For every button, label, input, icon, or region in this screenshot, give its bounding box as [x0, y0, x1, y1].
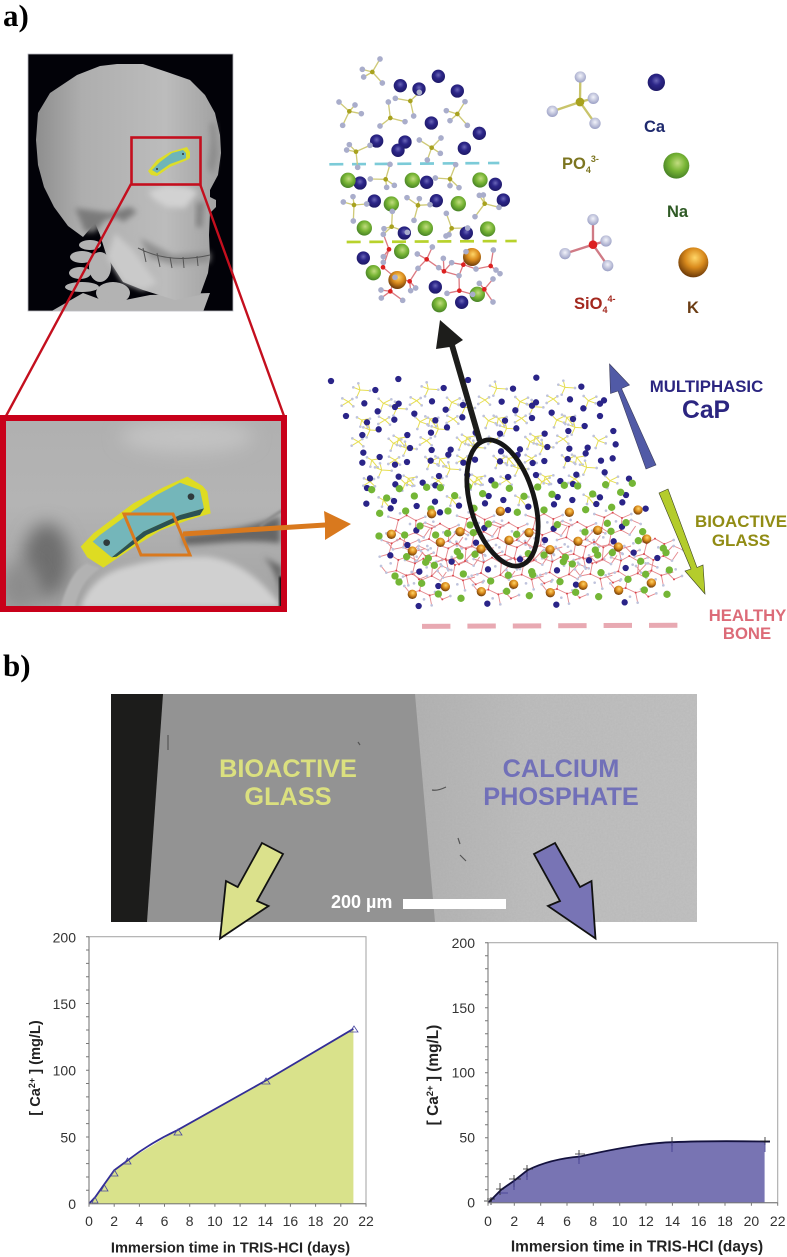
x axis numbers: 22: [770, 1213, 786, 1229]
panel: layered coating molecular model: [331, 378, 683, 606]
x axis numbers: 12: [638, 1213, 654, 1229]
x axis numbers: 14: [258, 1213, 273, 1229]
y axis title: ] (mg/L): [425, 1025, 442, 1085]
chart: calcium phosphate Ca release: [425, 935, 786, 1256]
x axis numbers: 0: [85, 1213, 93, 1229]
panel: 3D skull with implant: [28, 54, 233, 312]
x axis numbers: 10: [207, 1213, 223, 1229]
x axis title: Immersion time in TRIS-HCI (days): [511, 1238, 763, 1256]
y axis title: 2+: [425, 1085, 436, 1096]
legend: K atom: [678, 247, 708, 277]
label: multiphasic CaP: [650, 377, 763, 424]
legend label: Ca: Ca: [644, 118, 666, 136]
zoom box on skull: [132, 138, 200, 184]
legend label: PO4 3-: PO: [562, 155, 586, 173]
x axis numbers: 16: [691, 1213, 707, 1229]
orange selection parallelogram: [124, 514, 190, 555]
x axis numbers: 10: [612, 1213, 628, 1229]
arrow: bioactive glass to chart: [220, 843, 283, 938]
label: bioactive glass: GLASS: [712, 531, 770, 550]
y axis numbers: 200: [53, 930, 76, 946]
y axis numbers: 50: [60, 1130, 76, 1146]
legend label: Na: Na: [667, 203, 689, 221]
silicon atoms: [383, 249, 491, 291]
teeth: [138, 248, 210, 268]
arrow: calcium phosphate to chart: [534, 843, 596, 938]
label: multiphasic CaP: CaP: [682, 397, 730, 424]
scale bar: [403, 899, 506, 909]
y axis numbers: 150: [53, 996, 76, 1012]
legend: Ca atom: [648, 74, 665, 91]
label: bioactive glass on SEM: [219, 755, 357, 811]
green arrow: bioactive glass direction: [659, 489, 705, 594]
chart: bioactive glass Ca release: [27, 930, 374, 1256]
oxygen atoms: [339, 59, 500, 302]
x axis numbers: 16: [283, 1213, 298, 1229]
axes and ticks: [485, 943, 778, 1206]
y axis numbers: 0: [68, 1196, 76, 1212]
skull shading: [75, 123, 218, 290]
label: bioactive glass: [695, 512, 787, 550]
label: healthy bone: BONE: [723, 624, 771, 643]
y axis numbers: 50: [459, 1130, 475, 1146]
legend label: SiO4 4-: 4-: [607, 294, 615, 304]
black arrow to close-up: [436, 320, 482, 442]
inset red frame: [3, 418, 284, 609]
x axis title: Immersion time in TRIS-HCI (days): [111, 1240, 350, 1256]
area under curve: [488, 1142, 765, 1203]
x axis numbers: 8: [589, 1213, 597, 1229]
area under curve: [89, 1029, 353, 1204]
x axis numbers: 2: [510, 1213, 518, 1229]
x axis numbers: [484, 1213, 786, 1229]
y axis numbers: 100: [452, 1064, 475, 1080]
blue divider line: [329, 163, 499, 164]
sodium atoms: [340, 172, 495, 312]
plot frame: [488, 943, 778, 1203]
implant: yellow border: [81, 477, 211, 568]
x axis numbers: 12: [232, 1213, 248, 1229]
green divider line: [347, 237, 517, 246]
y axis numbers: [452, 935, 475, 1210]
skull outline: [28, 54, 233, 311]
plus markers lower: [500, 1142, 765, 1193]
panel: enlarged implant inset: [0, 418, 351, 610]
plot frame: [89, 937, 366, 1204]
label: healthy bone: HEALTHY: [709, 606, 786, 625]
silicate network: [380, 511, 683, 605]
black magnifying ellipse: [454, 432, 551, 574]
x axis numbers: 6: [161, 1213, 169, 1229]
y axis title: [ Ca: [425, 1096, 442, 1125]
x axis numbers: 2: [110, 1213, 118, 1229]
label: calcium phosphate on SEM: [483, 755, 639, 811]
red silicate bonds: [381, 234, 500, 302]
phosphorus atoms: [349, 72, 485, 228]
label: bioactive glass: BIOACTIVE: [695, 512, 787, 531]
legend label: PO4 3-: 4: [586, 165, 591, 175]
triangle markers: [92, 1026, 358, 1203]
blue arrow: multiphasic CaP direction: [610, 364, 656, 469]
data line: [488, 1141, 770, 1203]
legend label: K: K: [687, 299, 699, 317]
x axis numbers: 20: [744, 1213, 759, 1229]
x axis numbers: 4: [537, 1213, 545, 1229]
implant: teal plate: [93, 483, 204, 557]
panel: SEM micrograph: [111, 694, 697, 922]
panel label: b): b): [3, 648, 31, 683]
implant on skull: [148, 147, 190, 176]
x axis numbers: 18: [308, 1213, 324, 1229]
y axis numbers: [53, 930, 76, 1212]
y axis title: ] (mg/L): [28, 1020, 44, 1078]
label: calcium phosphate on SEM: PHOSPHATE: [483, 783, 639, 811]
x axis numbers: 4: [136, 1213, 144, 1229]
plus markers: [484, 1137, 770, 1205]
legend: SiO4 tetrahedron: [559, 214, 613, 271]
orange arrow to molecular view: [183, 511, 351, 540]
y axis numbers: 200: [452, 935, 475, 951]
implant: screw holes: [103, 493, 194, 546]
x axis numbers: 22: [358, 1213, 374, 1229]
y axis numbers: 0: [467, 1194, 475, 1210]
axes and ticks: [86, 937, 366, 1207]
x axis numbers: 18: [717, 1213, 733, 1229]
yellow phosphate bonds: [339, 59, 499, 236]
legend: PO4 tetrahedron: [547, 71, 601, 129]
legend: Na atom: [663, 153, 689, 179]
zoom lines from skull to inset: [6, 184, 284, 416]
potassium atoms: [387, 505, 656, 599]
y axis numbers: 150: [452, 1000, 475, 1016]
panel: molecular close-up: [329, 59, 708, 312]
potassium atoms: [388, 248, 481, 289]
sodium atoms: [372, 483, 669, 598]
y axis numbers: 100: [53, 1062, 76, 1078]
x axis numbers: 6: [563, 1213, 571, 1229]
x axis numbers: 0: [484, 1213, 492, 1229]
label: bioactive glass on SEM: GLASS: [244, 783, 332, 811]
data line: [89, 1029, 353, 1204]
icon: neck vertebrae: [50, 240, 210, 312]
label: healthy bone: [709, 606, 786, 643]
icon: skull silhouette: [36, 64, 221, 300]
calcium atoms: [331, 378, 657, 606]
label: calcium phosphate on SEM: CALCIUM: [503, 755, 619, 783]
healthy bone dashed line: [422, 625, 678, 626]
calcium atoms: [353, 70, 510, 309]
legend label: SiO4 4-: SiO: [574, 295, 602, 313]
label: bioactive glass on SEM: BIOACTIVE: [219, 755, 357, 783]
x axis numbers: 14: [665, 1213, 680, 1229]
x axis numbers: 20: [333, 1213, 349, 1229]
legend label: PO4 3-: 3-: [591, 154, 599, 164]
y axis title: 2+: [27, 1078, 37, 1088]
scale bar label: 200 µm: [331, 892, 392, 912]
phosphate network: [342, 381, 618, 507]
x axis numbers: [85, 1213, 374, 1229]
legend label: SiO4 4-: 4: [602, 305, 607, 315]
y axis title: [ Ca: [28, 1088, 44, 1116]
x axis numbers: 8: [186, 1213, 194, 1229]
label: multiphasic CaP: MULTIPHASIC: [650, 377, 763, 396]
implant: dark lower edge: [112, 508, 204, 557]
